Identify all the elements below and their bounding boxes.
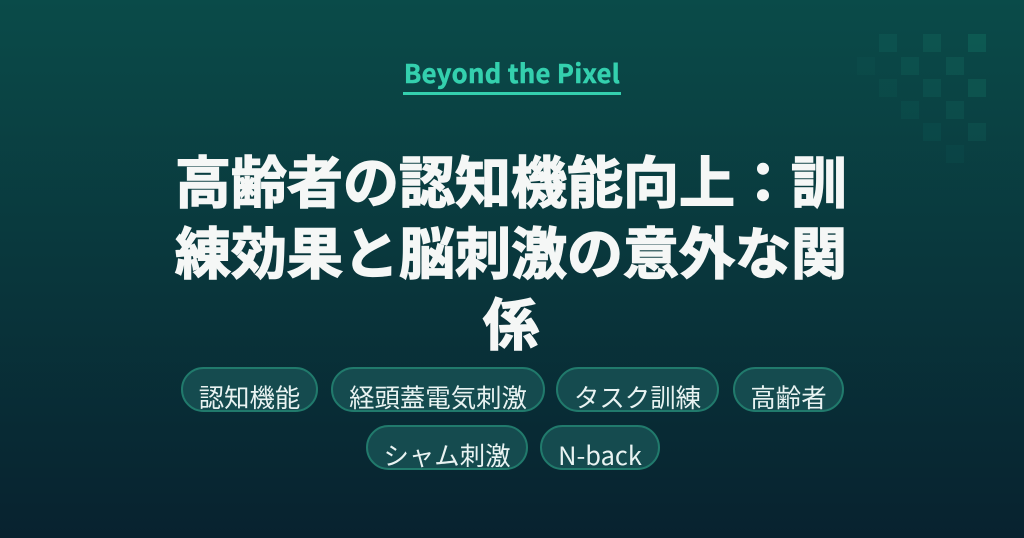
tag: タスク訓練: タスク訓練	[574, 379, 701, 415]
brand heading: Beyond the Pixel: Beyond the Pixel	[404, 54, 620, 91]
tag: シャム刺激	[366, 425, 528, 470]
tag: N-back: N-back	[558, 437, 642, 473]
tag: 高齢者: 高齢者	[750, 379, 827, 415]
decorative square pattern	[879, 34, 986, 141]
tag: 認知機能	[181, 367, 318, 412]
tag: N-back	[540, 425, 660, 470]
tag: 経頭蓋電気刺激: 経頭蓋電気刺激	[349, 379, 527, 415]
tag: シャム刺激: シャム刺激	[384, 437, 510, 473]
title: 練効果と脳刺激の意外な関	[175, 210, 847, 291]
tag: 高齢者	[733, 367, 844, 412]
tag: 経頭蓋電気刺激	[331, 367, 545, 412]
title: 高齢者の認知機能向上：訓	[175, 139, 847, 220]
title	[174, 139, 847, 362]
tag: 認知機能: 認知機能	[199, 379, 300, 415]
tag: タスク訓練	[556, 367, 719, 412]
title: 係	[483, 281, 539, 362]
tags	[181, 367, 844, 473]
